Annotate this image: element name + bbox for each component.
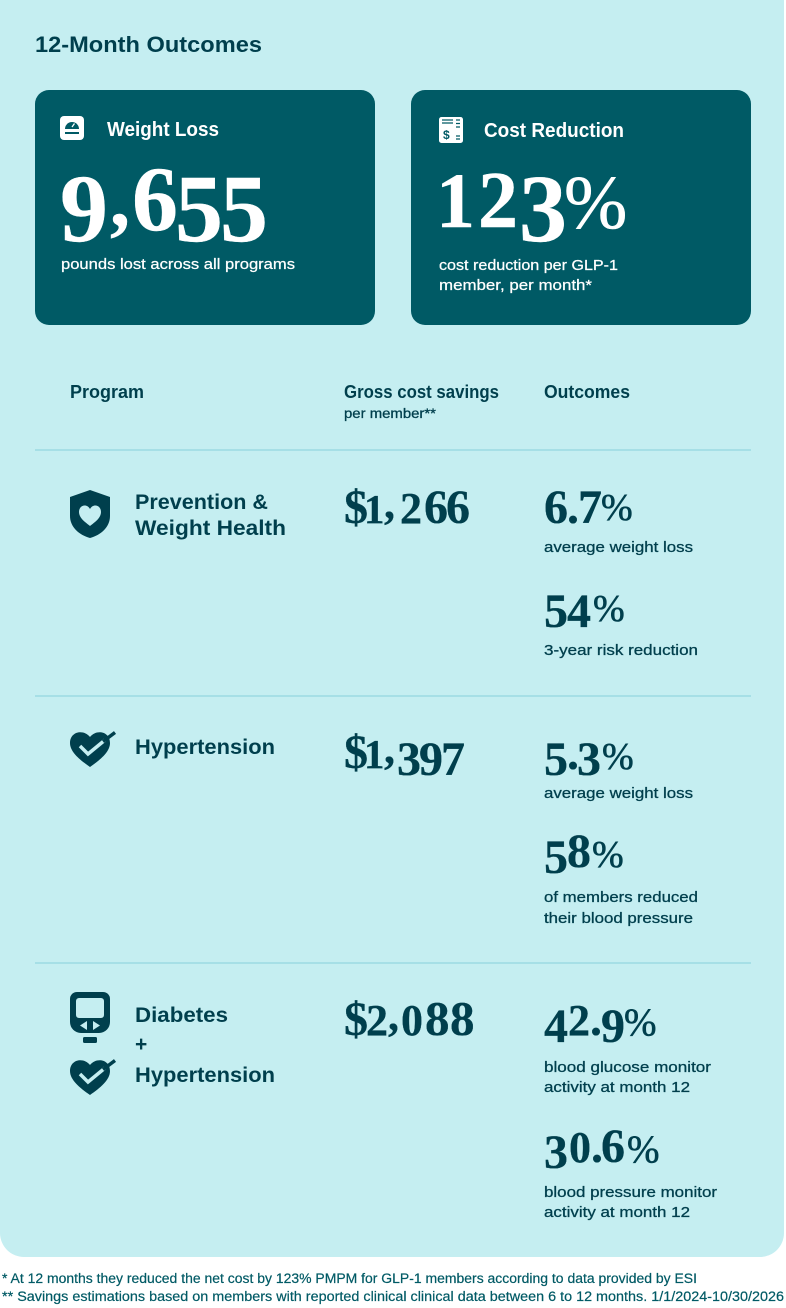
savings: , [388,991,399,1040]
stat: 9,655: 6 [132,148,178,250]
savings: 1 [364,486,384,532]
outcome: 30.6%: 0 [569,1123,591,1172]
savings: 6 [424,481,448,534]
outcome: 58%: their blood pressure [544,910,693,927]
icon: receipt [439,117,463,143]
savings: 7 [441,733,465,786]
program name: Hypertension [135,736,275,759]
table header [70,382,630,421]
outcome: 58%: 5 [544,831,568,884]
stat: 123%: 1 [436,157,475,244]
outcome: 6.7%: 6 [544,481,568,534]
table header: Gross cost savings [344,382,499,402]
caption: cost reduction per member: cost reduction per GLP-1 [439,257,618,274]
savings: 2 [366,996,388,1045]
program name: Weight Health [135,517,286,540]
outcome: 5.3%: average weight loss [544,785,693,802]
outcome: 5.3%: . [567,727,579,780]
panel: weight loss [35,90,375,325]
savings: 3 [397,733,421,786]
savings: 6 [446,481,470,534]
table header: Outcomes [544,382,630,402]
savings: $ [344,993,368,1046]
stat: 9,655: 9 [60,155,108,262]
table header: per member** [344,405,437,421]
savings: $ [344,481,368,534]
savings: 2 [400,484,422,533]
outcome: 6.7% [544,481,693,556]
icon: shield with heart [70,490,110,538]
savings: $ [344,726,368,779]
program name: Hypertension [135,1064,275,1087]
outcome: 42.9%: 9 [601,1000,625,1053]
savings: , [384,479,395,528]
footnotes [2,1271,784,1304]
icon: scale [60,116,84,140]
caption: cost reduction per member: member, per month* [439,277,592,294]
savings: 8 [450,991,474,1046]
footnotes: ** Savings estimations based on members with reported clinical clinical data between 6 to 12 months. 1/1/2024-10/30/2026 [2,1289,784,1304]
savings: 8 [425,991,450,1046]
outcome: 5.3%: 3 [577,733,601,786]
outcome: 6.7%: . [567,481,579,534]
outcome: 5.3%: % [602,736,634,778]
savings: 1 [364,731,384,777]
row: hypertension [70,724,698,927]
table header: Program [70,382,144,402]
outcome: 6.7%: 7 [578,481,602,534]
outcome: 30.6%: 3 [544,1126,568,1179]
stat: 9,655: 5 [175,155,223,262]
outcome: 6.7%: % [601,487,633,529]
program name: + [135,1033,147,1056]
outcome: 5.3%: 5 [544,733,568,786]
outcome: 42.9%: activity at month 12 [544,1079,690,1096]
program name [135,491,286,540]
stat: 123%: 3 [519,155,567,262]
caption: cost reduction per member [439,257,618,294]
outcome: 6.7%: average weight loss [544,539,693,556]
icon: heart with check [70,1060,115,1095]
row: prevention and weight health [70,479,698,659]
savings: , [384,724,395,773]
program name: Prevention & [135,491,268,514]
program name [135,1004,275,1087]
outcome: 42.9%: . [590,993,602,1046]
outcome: 30.6%: blood pressure monitor [544,1184,717,1201]
row: diabetes and hypertension [70,991,717,1221]
panel: cost reduction [411,90,751,325]
icon: heart with check [70,732,115,767]
outcome: 54% [544,585,698,659]
outcome: 30.6%: % [627,1128,660,1171]
outcome: 30.6%: activity at month 12 [544,1204,690,1221]
title: 12-Month Outcomes [35,32,262,57]
heading: cost reduction: Cost Reduction [484,120,624,142]
stat: 123%: 2 [478,157,518,245]
outcome: 30.6% [544,1120,717,1221]
outcome: 54%: % [593,588,625,630]
caption: pounds lost: pounds lost across all programs [61,256,295,273]
outcome: 5.3% [544,727,693,802]
outcome: 42.9%: 2 [568,996,590,1045]
outcome: 54%: 3-year risk reduction [544,642,698,659]
outcome: 58%: % [592,834,624,876]
icon: receipt: $ [443,128,450,142]
program name: Diabetes [135,1004,228,1027]
stat: 9,655: 5 [220,155,268,262]
outcome: 54%: 5 [544,585,568,638]
outcome: 54%: 4 [567,585,591,638]
outcome: 58%: of members reduced [544,889,698,906]
outcome: 42.9% [544,993,711,1096]
icon: glucose meter [70,992,110,1043]
savings: 0 [401,996,423,1045]
outcome: 58% [544,825,698,927]
stat: 123%: % [564,161,627,245]
outcome: 30.6%: . [591,1120,603,1173]
outcome: 42.9%: 4 [544,1000,568,1053]
outcome: 30.6%: 6 [601,1120,625,1173]
outcome: 58%: 8 [567,825,591,878]
stat: 9,655: , [110,156,130,244]
heading: weight loss: Weight Loss [107,119,219,141]
footnotes: * At 12 months they reduced the net cost by 123% PMPM for GLP-1 members according to data provided by ESI [2,1271,697,1286]
outcome: 42.9%: % [624,1001,656,1044]
outcome: 42.9%: blood glucose monitor [544,1059,711,1076]
savings: 9 [419,733,443,786]
